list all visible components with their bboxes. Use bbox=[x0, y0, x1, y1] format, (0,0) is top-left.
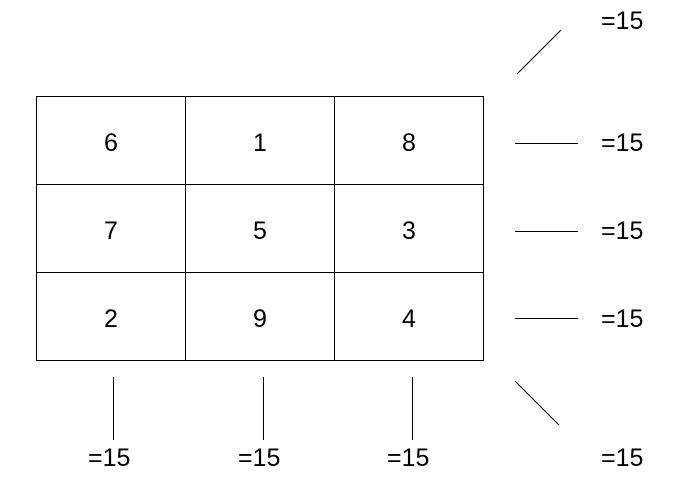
right sum labels: =15 bbox=[601, 217, 643, 245]
grid numbers: 3 bbox=[402, 217, 416, 245]
right sum labels: =15 bbox=[601, 444, 643, 472]
right sum labels: =15 bbox=[601, 7, 643, 35]
column sum lines bbox=[114, 377, 412, 440]
grid numbers: 6 bbox=[104, 129, 118, 157]
grid numbers: 2 bbox=[104, 305, 118, 333]
grid numbers: 8 bbox=[402, 129, 416, 157]
magic square grid bbox=[36, 96, 484, 360]
right sum labels bbox=[601, 7, 643, 472]
row and diagonal sum lines bbox=[515, 30, 578, 425]
right sum labels: =15 bbox=[601, 305, 643, 333]
right sum labels: =15 bbox=[601, 129, 643, 157]
grid numbers: 5 bbox=[253, 217, 267, 245]
grid numbers: 7 bbox=[104, 217, 118, 245]
bottom sum labels bbox=[88, 444, 429, 472]
bottom sum labels: =15 bbox=[238, 444, 280, 472]
grid numbers bbox=[104, 129, 416, 333]
grid numbers: 4 bbox=[402, 305, 416, 333]
bottom sum labels: =15 bbox=[387, 444, 429, 472]
grid numbers: 9 bbox=[253, 305, 267, 333]
bottom sum labels: =15 bbox=[88, 444, 130, 472]
grid numbers: 1 bbox=[253, 129, 267, 157]
